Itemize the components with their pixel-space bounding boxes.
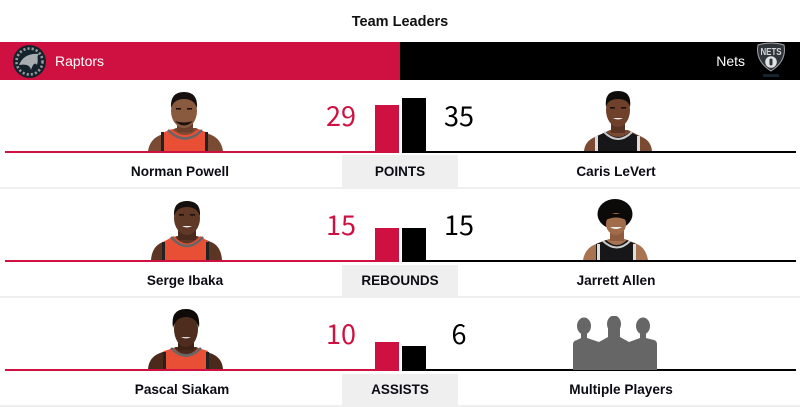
bar: Nets points — [402, 98, 426, 153]
bar: Nets assists — [402, 346, 426, 371]
stat label: points — [342, 155, 458, 187]
value: Nets assists: 6 — [452, 313, 466, 352]
team name: Raptors: Raptors — [55, 53, 104, 69]
baseline: Raptors — [5, 369, 375, 371]
bar: Raptors points — [375, 105, 399, 153]
value: Raptors rebounds: 15 — [326, 204, 356, 243]
title: Team Leaders — [352, 14, 448, 30]
value: Raptors assists: 10 — [326, 313, 356, 352]
stat label: rebounds — [342, 265, 458, 297]
value: Nets points: 35 — [444, 95, 474, 134]
name: Serge Ibaka: Serge Ibaka — [147, 273, 223, 288]
name: Jarrett Allen: Jarrett Allen — [577, 273, 655, 288]
value: Nets rebounds: 15 — [444, 204, 474, 243]
baseline: Raptors — [5, 151, 375, 153]
baseline: Nets — [426, 260, 796, 262]
icon: Nets logo — [757, 42, 785, 77]
bar: Raptors rebounds — [375, 228, 399, 262]
row: rebounds — [5, 199, 796, 296]
baseline: Nets — [426, 369, 796, 371]
baseline: Nets — [426, 151, 796, 153]
value: Raptors points: 29 — [326, 95, 356, 134]
stat label: assists — [342, 374, 458, 406]
player photo: Caris LeVert — [584, 91, 652, 151]
name: Caris LeVert: Caris LeVert — [576, 164, 656, 179]
player photo: Pascal Siakam — [148, 309, 223, 369]
row: assists — [5, 309, 796, 405]
baseline: Raptors — [5, 260, 375, 262]
player photo: Norman Powell — [148, 92, 223, 151]
name: Pascal Siakam: Pascal Siakam — [135, 382, 229, 397]
name: Multiple Players: Multiple Players — [569, 382, 673, 397]
icon: Raptors logo — [13, 45, 46, 78]
stat label: assists: ASSISTS — [371, 382, 429, 397]
bar: Nets rebounds — [402, 228, 426, 262]
panel: Nets header — [400, 42, 800, 80]
player photo: Serge Ibaka — [151, 201, 222, 260]
stat label: rebounds: REBOUNDS — [361, 273, 439, 288]
panel: Raptors header — [0, 42, 400, 80]
player photo: Jarrett Allen — [583, 199, 648, 260]
team name: Nets: Nets — [716, 53, 745, 69]
stat label: points: POINTS — [375, 164, 425, 179]
icon: multiple players silhouette — [573, 316, 657, 370]
row: points — [5, 91, 796, 187]
name: Norman Powell: Norman Powell — [131, 164, 229, 179]
bar: Raptors assists — [375, 342, 399, 371]
